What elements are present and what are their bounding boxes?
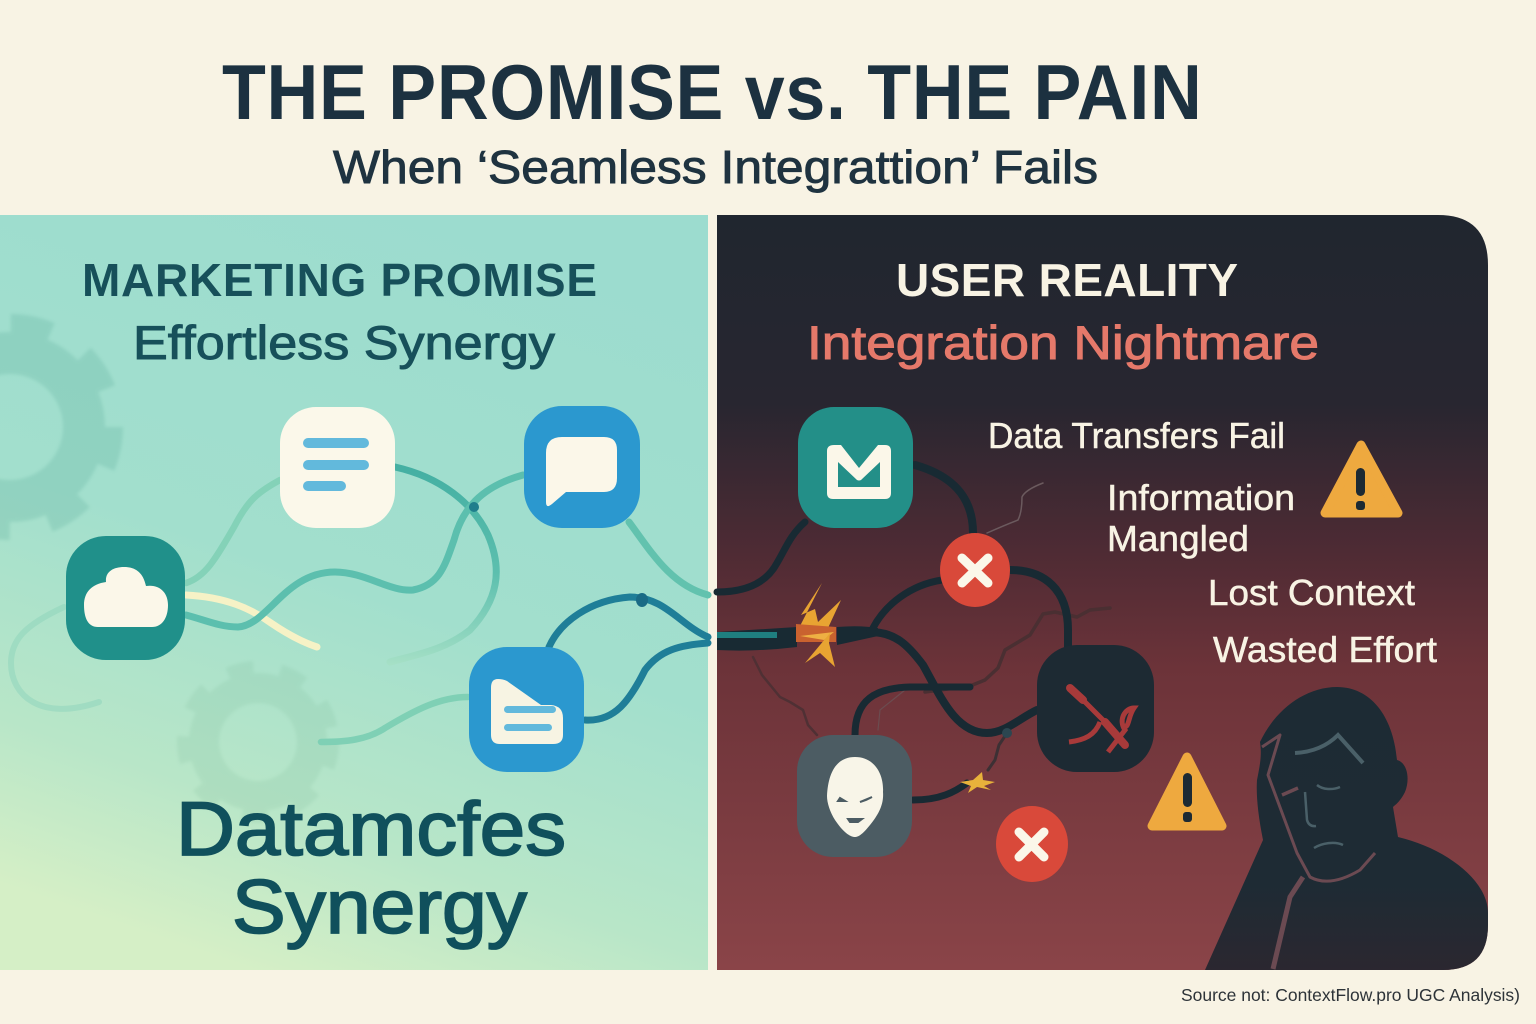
icon: red error bottom	[996, 806, 1068, 882]
icon: red error top	[940, 533, 1010, 607]
label: information mangled: Mangled	[1107, 518, 1249, 559]
icon: cloud tile	[66, 536, 185, 660]
figure: frustrated user	[1205, 687, 1488, 970]
label: information mangled	[1107, 477, 1295, 559]
cracks	[753, 483, 1110, 770]
icon: file tile	[469, 647, 584, 772]
panel: user reality	[717, 215, 1488, 970]
heading: marketing promise: MARKETING PROMISE	[82, 254, 597, 306]
broken cables	[717, 465, 1068, 800]
label: lost context: Lost Context	[1208, 572, 1415, 613]
label: information mangled: Information	[1107, 477, 1295, 518]
label: data transfers fail: Data Transfers Fail	[988, 415, 1285, 456]
label: wasted effort: Wasted Effort	[1213, 629, 1437, 670]
title: THE PROMISE vs. THE PAIN	[222, 48, 1202, 136]
heading: integration nightmare: Integration Nightmare	[807, 316, 1319, 369]
icon: chat tile	[524, 406, 640, 528]
source note: Source not: ContextFlow.pro UGC Analysis)	[1181, 985, 1520, 1005]
icon: document tile	[280, 407, 395, 528]
icon: cable knot	[1002, 728, 1012, 738]
icon: warning bottom	[1152, 757, 1222, 826]
icon: warning top	[1325, 445, 1398, 513]
icon: background gear bottom	[184, 668, 332, 816]
icon: mail tile	[798, 407, 913, 528]
icon: small spark	[960, 772, 995, 793]
large label: datamcfes: Datamcfes	[176, 787, 566, 872]
connector lines	[11, 467, 708, 742]
heading: user reality: USER REALITY	[896, 254, 1238, 306]
panel: marketing promise	[0, 215, 708, 970]
icon: face tile	[797, 735, 912, 857]
icon: broken tool tile	[1037, 645, 1154, 772]
large label: synergy: Synergy	[232, 865, 527, 950]
icon: background gear top	[0, 324, 113, 530]
icon: spark on main cable	[796, 583, 841, 667]
subtitle: When ‘Seamless Integrattion’ Fails	[333, 141, 1098, 193]
heading: effortless synergy: Effortless Synergy	[133, 316, 556, 369]
